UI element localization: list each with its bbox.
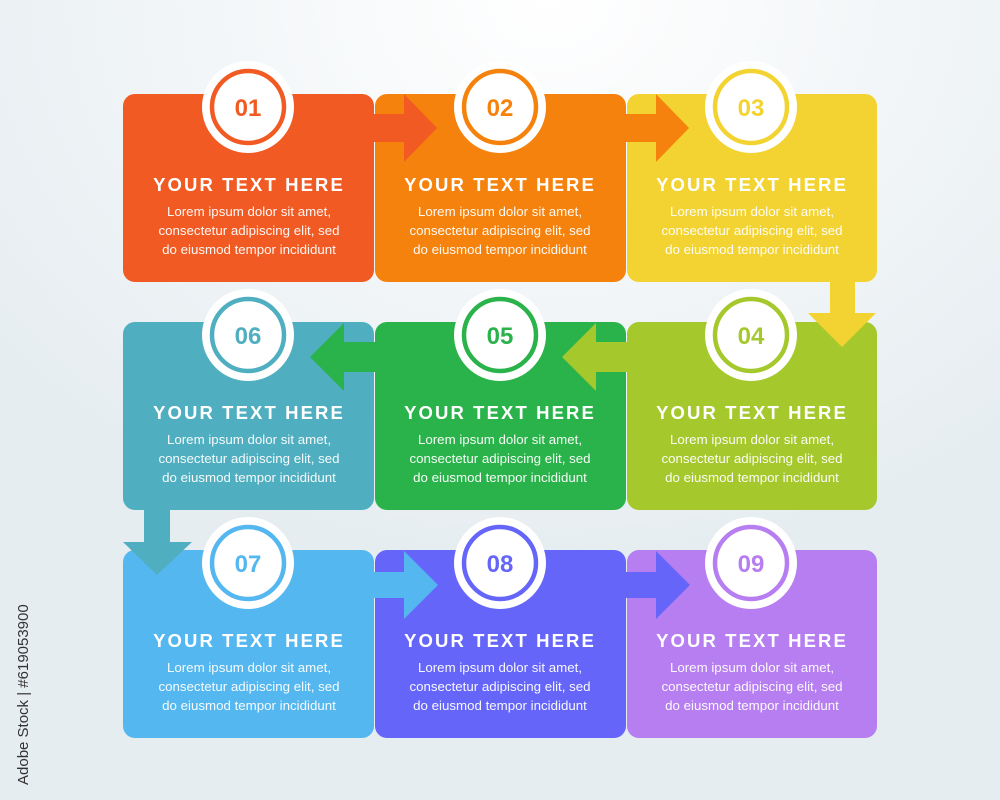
panel: step 02: YOUR TEXT HERE: [404, 174, 596, 195]
panel: step 08: consectetur adipiscing elit, sed: [409, 679, 591, 694]
panel: step 06: do eiusmod tempor incididunt: [162, 470, 336, 485]
panel: step 06: YOUR TEXT HERE: [153, 402, 345, 423]
icon: number badge 06: [202, 289, 294, 381]
arrow: 05 to 06: [310, 323, 376, 391]
panel: step 06: consectetur adipiscing elit, sed: [158, 451, 340, 466]
arrow: 08 to 09: [625, 551, 690, 619]
panel: step 07: Lorem ipsum dolor sit amet,: [167, 660, 331, 675]
icon: number badge 01: [202, 61, 294, 153]
panel: step 04: YOUR TEXT HERE: [656, 402, 848, 423]
icon: number badge 03: 03: [738, 95, 764, 122]
panel: step 07: do eiusmod tempor incididunt: [162, 698, 336, 713]
icon: number badge 09: [705, 517, 797, 609]
panel: step 03: do eiusmod tempor incididunt: [665, 242, 839, 257]
panel: step 09: YOUR TEXT HERE: [656, 630, 848, 651]
panel: step 06: [123, 322, 374, 510]
panel: step 02: do eiusmod tempor incididunt: [413, 242, 587, 257]
icon: number badge 09: 09: [738, 551, 764, 578]
icon: number badge 05: [454, 289, 546, 381]
panel: step 09: Lorem ipsum dolor sit amet,: [670, 660, 834, 675]
panel: step 04: consectetur adipiscing elit, sed: [661, 451, 843, 466]
panel: step 08: [375, 550, 626, 738]
panel: step 04: do eiusmod tempor incididunt: [665, 470, 839, 485]
icon: number badge 02: 02: [487, 95, 513, 122]
arrow: 02 to 03: [625, 94, 689, 162]
arrow: 01 to 02: [373, 94, 437, 162]
icon: number badge 03: [705, 61, 797, 153]
icon: number badge 04: 04: [738, 323, 765, 350]
icon: number badge 01: 01: [235, 95, 261, 122]
icon: number badge 06: 06: [235, 323, 261, 350]
panel: step 09: [627, 550, 877, 738]
panel: step 02: consectetur adipiscing elit, sed: [409, 223, 591, 238]
panel: step 05: Lorem ipsum dolor sit amet,: [418, 432, 582, 447]
icon: number badge 02: [454, 61, 546, 153]
icon: number badge 05: 05: [487, 323, 513, 350]
panel: step 03: [627, 94, 877, 282]
panel: step 07: consectetur adipiscing elit, sed: [158, 679, 340, 694]
panel: step 01: do eiusmod tempor incididunt: [162, 242, 336, 257]
arrow: 06 to 07: [123, 509, 192, 575]
panel: step 01: [123, 94, 374, 282]
panel: step 09: do eiusmod tempor incididunt: [665, 698, 839, 713]
panel: step 04: [627, 322, 877, 510]
panel: step 02: Lorem ipsum dolor sit amet,: [418, 204, 582, 219]
panel: step 06: Lorem ipsum dolor sit amet,: [167, 432, 331, 447]
icon: number badge 04: [705, 289, 797, 381]
panel: step 05: [375, 322, 626, 510]
panel: step 05: do eiusmod tempor incididunt: [413, 470, 587, 485]
panel: step 02: [375, 94, 626, 282]
panel: step 04: Lorem ipsum dolor sit amet,: [670, 432, 834, 447]
arrow: 03 to 04: [808, 281, 876, 347]
panel: step 07: YOUR TEXT HERE: [153, 630, 345, 651]
panel: step 01: YOUR TEXT HERE: [153, 174, 345, 195]
panel: step 01: Lorem ipsum dolor sit amet,: [167, 204, 331, 219]
panel: step 08: YOUR TEXT HERE: [404, 630, 596, 651]
panel: step 08: Lorem ipsum dolor sit amet,: [418, 660, 582, 675]
panel: step 03: YOUR TEXT HERE: [656, 174, 848, 195]
panel: step 03: Lorem ipsum dolor sit amet,: [670, 204, 834, 219]
panel: step 09: consectetur adipiscing elit, sed: [661, 679, 843, 694]
icon: number badge 07: 07: [235, 551, 261, 578]
arrow: 07 to 08: [373, 551, 438, 619]
icon: number badge 08: [454, 517, 546, 609]
panel: step 07: [123, 550, 374, 738]
icon: number badge 07: [202, 517, 294, 609]
panel: step 08: do eiusmod tempor incididunt: [413, 698, 587, 713]
icon: number badge 08: 08: [487, 551, 513, 578]
panel: step 05: consectetur adipiscing elit, sed: [409, 451, 591, 466]
side credit text: Adobe Stock | #619053900: [15, 604, 32, 785]
arrow: 04 to 05: [562, 323, 628, 391]
panel: step 05: YOUR TEXT HERE: [404, 402, 596, 423]
panel: step 03: consectetur adipiscing elit, sed: [661, 223, 843, 238]
panel: step 01: consectetur adipiscing elit, sed: [158, 223, 340, 238]
